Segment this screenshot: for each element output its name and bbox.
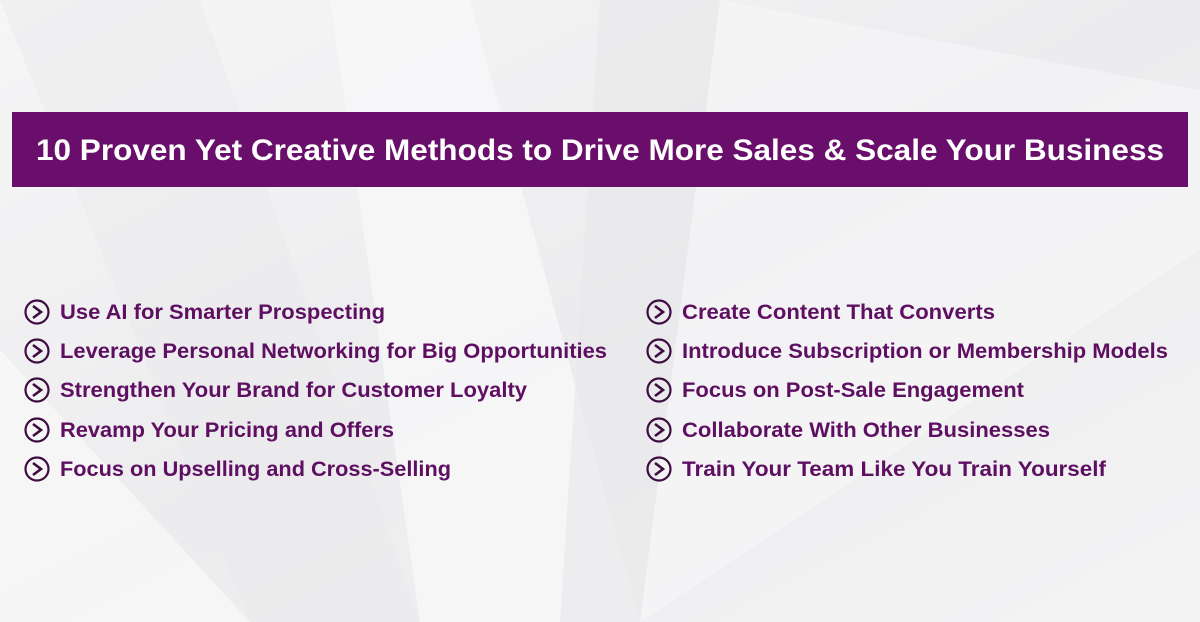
item 9: Collaborate With Other Businesses [682, 419, 1050, 442]
item 7: Introduce Subscription or Membership Models [682, 340, 1168, 363]
item 5: Focus on Upselling and Cross-Selling [60, 458, 451, 481]
item 10: Train Your Team Like You Train Yourself [682, 458, 1107, 481]
item 4: Revamp Your Pricing and Offers [60, 419, 394, 442]
item 2: Leverage Personal Networking for Big Opportunities [60, 340, 607, 363]
list: right column [648, 300, 1168, 481]
item 1: Use AI for Smarter Prospecting [60, 301, 385, 324]
title bar [12, 112, 1188, 187]
list: left column [26, 300, 607, 481]
item 3: Strengthen Your Brand for Customer Loyalty [60, 379, 527, 402]
title: 10 Proven Yet Creative Methods to Drive More Sales & Scale Your Business [36, 134, 1164, 167]
item 8: Focus on Post-Sale Engagement [682, 379, 1024, 402]
item 6: Create Content That Converts [682, 301, 995, 324]
